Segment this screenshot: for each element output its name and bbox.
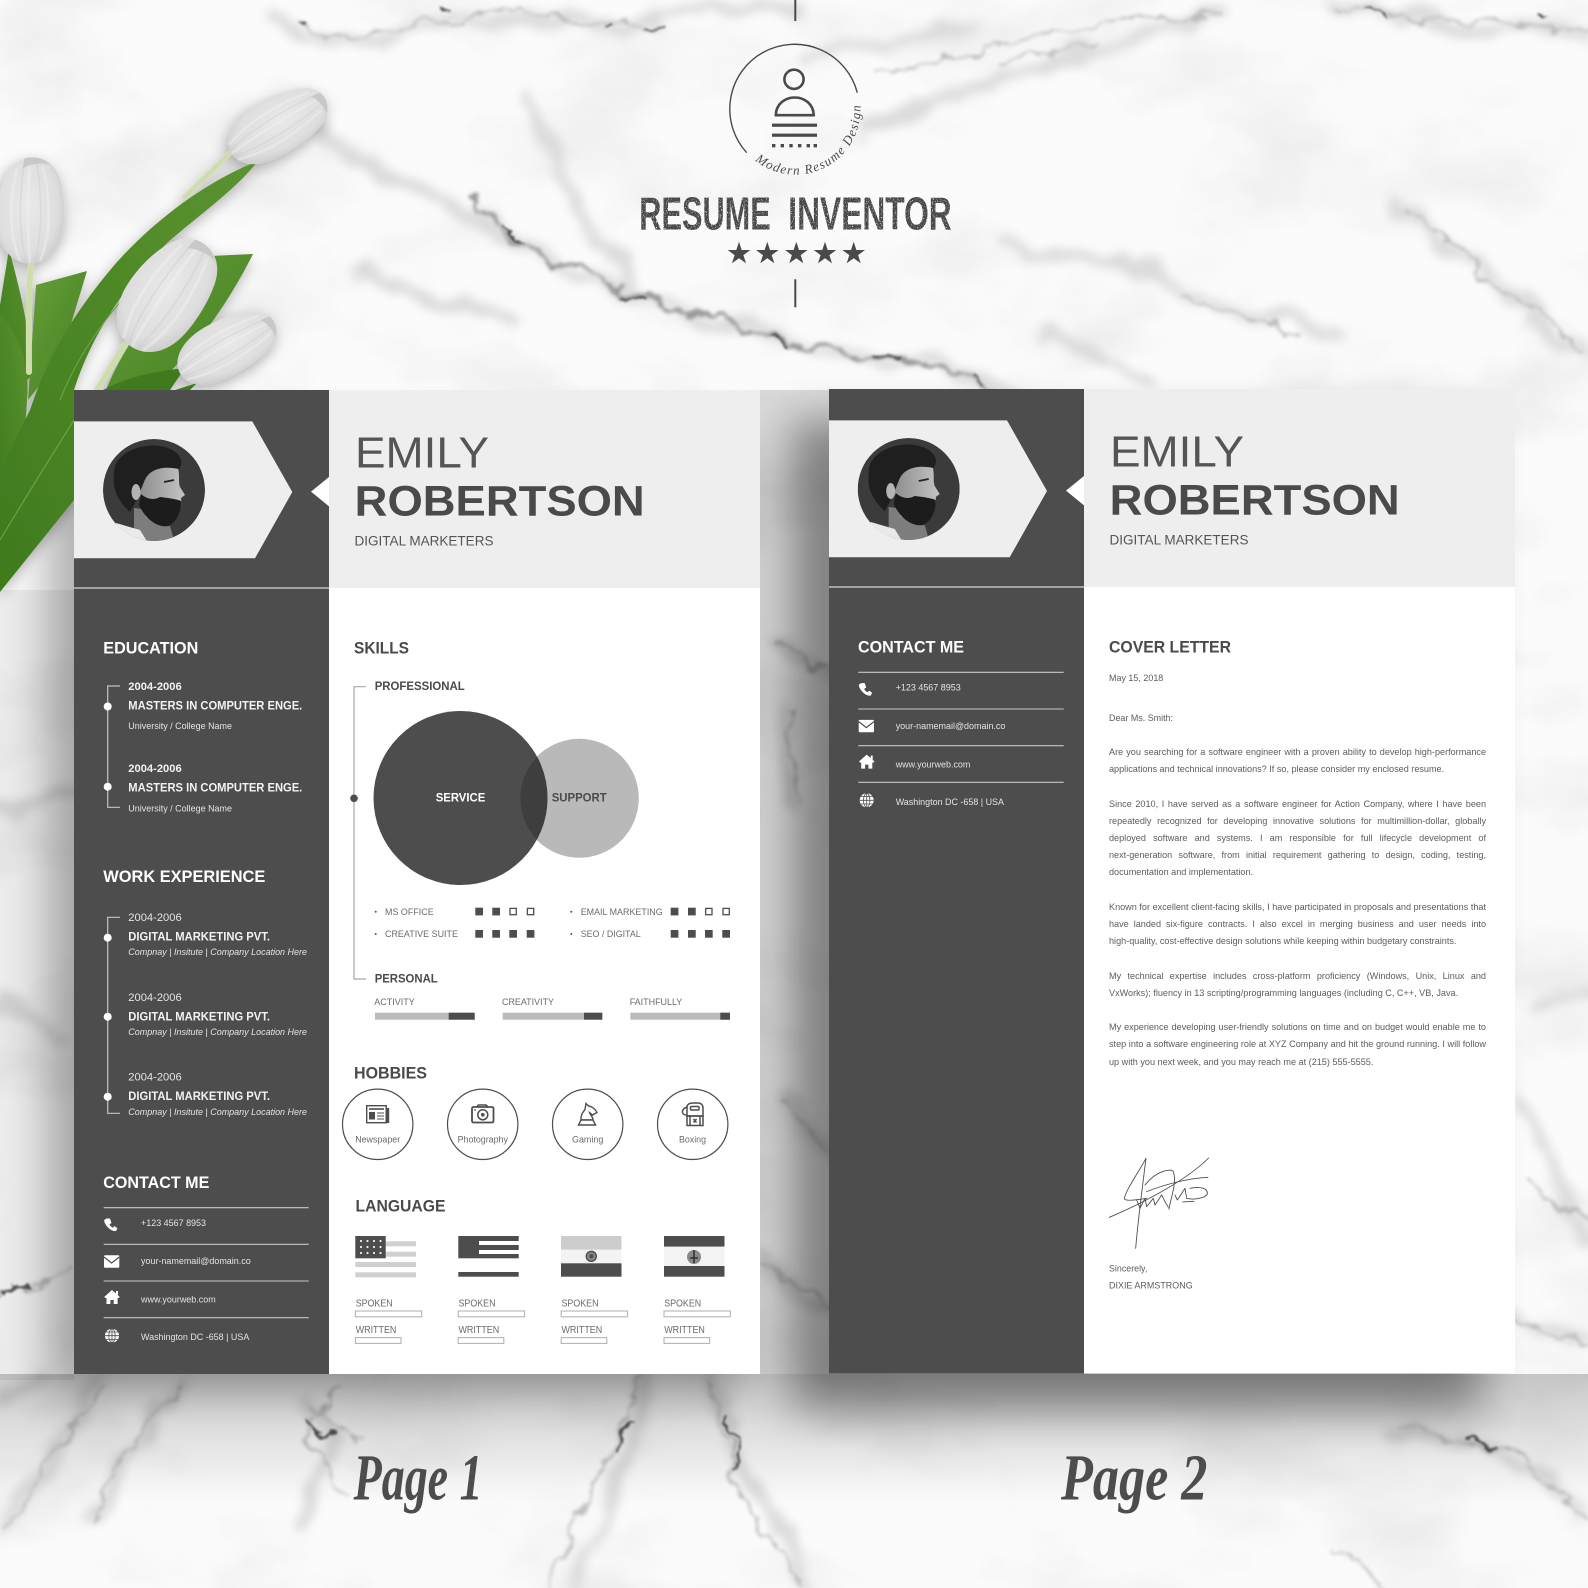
name: DIGITAL MARKETERS — [1110, 533, 1249, 548]
venn diagram: SUPPORT — [552, 791, 607, 805]
education section: 2004-2006 — [128, 763, 182, 775]
bottom line — [794, 279, 796, 307]
skill ratings — [375, 907, 730, 940]
paragraph 2: repeatedly recognized for developing innovative solutions for multimillion-dollar, globally — [1109, 816, 1486, 826]
header band — [1084, 389, 1515, 587]
education section: MASTERS IN COMPUTER ENGE. — [128, 698, 302, 712]
hobbies section — [342, 1065, 728, 1160]
paragraph 5: step into a software engineering role at XYZ Company and hit the ground running. I will follow — [1109, 1039, 1486, 1049]
education section — [103, 639, 302, 813]
personal bars: PERSONAL — [375, 972, 438, 986]
venn diagram: SERVICE — [436, 791, 485, 805]
contact section: your-namemail@domain.co — [141, 1256, 251, 1266]
paragraph 1: Are you searching for a software engineer with a proven ability to develop high-performance — [1109, 747, 1486, 757]
stars — [728, 242, 865, 263]
tulip buds — [0, 72, 339, 398]
paragraph 4: My technical expertise includes cross-platform proficiency (Windows, Unix, Linux and — [1109, 971, 1486, 981]
stems — [29, 150, 233, 390]
language bars: WRITTEN — [458, 1325, 499, 1336]
skill ratings: MS OFFICE — [385, 907, 434, 918]
paragraph 3: high-quality, cost-effective design solutions while keeping within budgetary constraints. — [1109, 936, 1456, 946]
work experience section: DIGITAL MARKETING PVT. — [128, 1009, 270, 1023]
work experience section: 2004-2006 — [128, 912, 182, 924]
personal bars: FAITHFULLY — [630, 997, 683, 1008]
work experience section: WORK EXPERIENCE — [103, 868, 265, 886]
contact section: CONTACT ME — [103, 1174, 209, 1192]
work experience section: 2004-2006 — [128, 992, 182, 1004]
contact section: www.yourweb.com — [895, 759, 971, 769]
portrait photo — [858, 438, 960, 547]
brand name: RESUME — [639, 187, 771, 239]
language bars — [355, 1299, 730, 1343]
paragraph 5 — [1109, 1022, 1486, 1067]
language bars: WRITTEN — [356, 1325, 396, 1336]
icon: circle person emblem — [730, 44, 857, 153]
contact section: CONTACT ME — [858, 638, 964, 656]
sign-off: DIXIE ARMSTRONG — [1109, 1281, 1193, 1291]
dark sidebar — [829, 389, 1084, 1374]
caption: page 1: Page 1 — [353, 1441, 483, 1514]
icon: boxing glove — [682, 1103, 703, 1126]
name — [354, 428, 645, 549]
flag: tricolour with wheel — [561, 1236, 622, 1277]
brand name: INVENTOR — [788, 187, 952, 239]
contact section — [858, 638, 1064, 807]
icon: phone — [859, 683, 872, 696]
work experience section: Compnay | Insitute | Company Location Here — [128, 1107, 307, 1117]
skill ratings: EMAIL MARKETING — [581, 907, 663, 918]
skills section: SKILLS — [354, 639, 409, 657]
paragraph 3: have landed six-figure contracts. I also excel in merging business and user needs into — [1109, 919, 1486, 929]
language section: LANGUAGE — [356, 1197, 446, 1215]
date and salutation — [1109, 673, 1173, 723]
work experience section: Compnay | Insitute | Company Location Here — [128, 1027, 307, 1037]
paragraph 2 — [1109, 798, 1486, 877]
icon: envelope — [859, 720, 874, 732]
dark sidebar — [74, 390, 329, 1374]
icon: chess knight — [578, 1104, 597, 1125]
language bars: SPOKEN — [562, 1299, 598, 1310]
paragraph 4 — [1109, 971, 1486, 998]
paragraph 1 — [1109, 747, 1486, 774]
contact section: +123 4567 8953 — [141, 1218, 206, 1228]
brand name — [639, 187, 952, 239]
hobbies section: Newspaper — [355, 1135, 401, 1146]
education section: 2004-2006 — [128, 681, 182, 693]
paragraph 4: VxWorks); fluency in 13 scripting/programming languages (including C, C++, VB, Java. — [1109, 988, 1458, 998]
icon: newspaper — [367, 1106, 389, 1123]
skills section: PROFESSIONAL — [375, 679, 465, 693]
heading: cover letter: COVER LETTER — [1109, 638, 1231, 656]
icon: globe — [860, 793, 874, 807]
icon: globe — [105, 1329, 119, 1343]
language bars: SPOKEN — [664, 1299, 701, 1310]
contact section: +123 4567 8953 — [896, 683, 961, 693]
hobbies section: Boxing — [679, 1135, 706, 1146]
leaves — [0, 161, 258, 592]
paragraph 3: Known for excellent client-facing skills, I have participated in proposals and presentations that — [1109, 902, 1486, 912]
personal bars: CREATIVITY — [502, 997, 555, 1008]
paragraph 1: applications and technical innovations? If so, please consider my enclosed resume. — [1109, 764, 1444, 774]
venn diagram — [374, 711, 639, 885]
hobbies section: HOBBIES — [354, 1065, 427, 1083]
name: ROBERTSON — [355, 478, 645, 526]
panel: page 1 resume — [74, 390, 760, 1374]
contact section: your-namemail@domain.co — [896, 721, 1005, 731]
signature — [1109, 1158, 1209, 1248]
icon: envelope — [104, 1255, 119, 1268]
name: EMILY — [1110, 427, 1244, 476]
top line — [794, 0, 796, 21]
photo arrow tag — [829, 420, 1047, 557]
skill ratings: SEO / DIGITAL — [581, 929, 641, 940]
tulip bouquet — [0, 72, 339, 592]
work experience section — [103, 868, 307, 1117]
hobbies section: Photography — [458, 1135, 508, 1146]
panel: page 2 cover letter — [829, 389, 1515, 1374]
education section: University / College Name — [128, 803, 232, 813]
date and salutation: Dear Ms. Smith: — [1109, 713, 1173, 723]
paragraph 5: up with you next week, and you may reach me at (215) 555-5555. — [1109, 1057, 1373, 1067]
education section: MASTERS IN COMPUTER ENGE. — [128, 781, 302, 795]
language bars: SPOKEN — [458, 1299, 496, 1310]
name: DIGITAL MARKETERS — [354, 534, 494, 549]
hobbies section: Gaming — [572, 1135, 603, 1146]
paragraph 2: next-generation software, from initial requirement gathering to design, coding, testing, — [1109, 850, 1486, 860]
paragraph 5: My experience developing user-friendly solutions on time and on budget would enable me to — [1109, 1022, 1486, 1032]
icon: phone — [104, 1218, 117, 1231]
language section — [355, 1197, 730, 1343]
language bars: SPOKEN — [356, 1299, 393, 1310]
work experience section: Compnay | Insitute | Company Location Here — [128, 947, 307, 957]
personal bars — [374, 972, 730, 1020]
contact section: Washington DC -658 | USA — [141, 1332, 250, 1342]
sign-off: Sincerely, — [1109, 1264, 1147, 1274]
photo arrow tag — [74, 421, 292, 558]
education section: EDUCATION — [103, 639, 198, 657]
skill ratings: CREATIVE SUITE — [385, 929, 458, 940]
personal bars: ACTIVITY — [374, 997, 415, 1008]
work experience section: 2004-2006 — [128, 1071, 182, 1083]
caption: page 2: Page 2 — [1060, 1441, 1207, 1514]
page shadows — [0, 390, 1588, 1504]
language bars: WRITTEN — [664, 1325, 705, 1336]
skills section — [350, 639, 730, 1020]
name: EMILY — [355, 428, 489, 477]
name: ROBERTSON — [1110, 477, 1400, 525]
logo: resume inventor — [639, 0, 952, 308]
paragraph 2: Since 2010, I have served as a software engineer for Action Company, where I have been — [1109, 798, 1486, 808]
flag: striped dark — [458, 1236, 519, 1277]
portrait photo — [103, 439, 205, 548]
work experience section: DIGITAL MARKETING PVT. — [128, 1089, 270, 1103]
icon: home — [104, 1290, 120, 1304]
icon: home — [859, 755, 874, 769]
contact section — [103, 1174, 309, 1343]
sign-off — [1109, 1264, 1193, 1291]
contact section: www.yourweb.com — [140, 1294, 216, 1304]
education section: University / College Name — [128, 721, 232, 731]
paragraph 3 — [1109, 902, 1486, 946]
icon: camera — [472, 1105, 494, 1122]
language bars: WRITTEN — [562, 1325, 602, 1336]
flag: emblem — [664, 1236, 724, 1277]
header band — [329, 390, 760, 588]
date and salutation: May 15, 2018 — [1109, 673, 1163, 683]
flag: usa light — [355, 1236, 416, 1277]
tagline: Modern Resume Design — [754, 106, 863, 175]
paragraph 2: deployed software and systems. I am responsible for full lifecycle development of — [1109, 833, 1486, 843]
letter body — [1109, 740, 1487, 1080]
paragraph 2: documentation and implementation. — [1109, 867, 1253, 877]
name — [1110, 427, 1400, 548]
contact section: Washington DC -658 | USA — [896, 797, 1005, 807]
work experience section: DIGITAL MARKETING PVT. — [128, 929, 270, 943]
